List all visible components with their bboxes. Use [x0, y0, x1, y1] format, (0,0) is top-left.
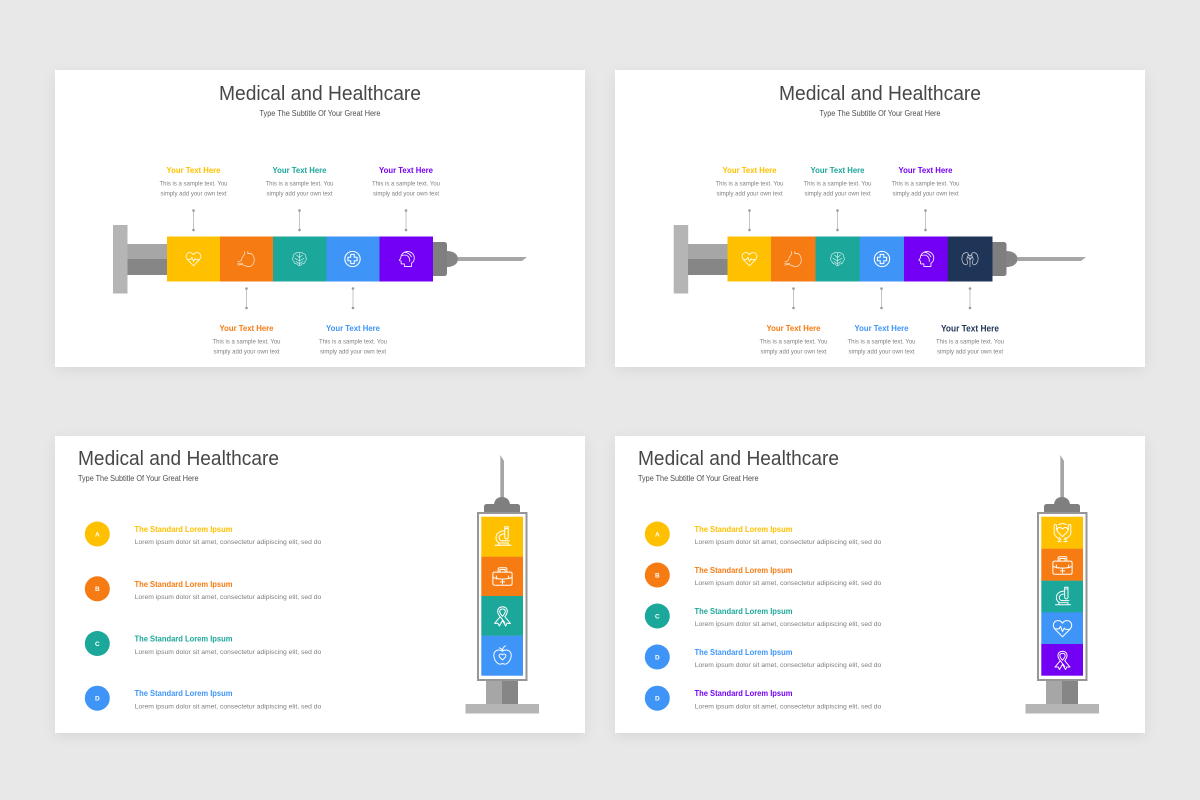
text block: blue: simply add your own text: [320, 349, 386, 356]
list item A: [645, 522, 882, 546]
barrel segments: [1041, 517, 1083, 676]
list item E labelled D: Lorem ipsum dolor sit amet, consectetur adipiscing elit, sed do: [695, 704, 882, 710]
icon: medical cross: [345, 251, 360, 267]
icon: kidneys: [962, 253, 978, 267]
icon: heart pulse: [1053, 621, 1072, 637]
text block: teal: [266, 165, 334, 198]
list item D: Lorem ipsum dolor sit amet, consectetur adipiscing elit, sed do: [695, 662, 882, 669]
vertical syringe plunger: [466, 680, 539, 714]
list item D: The Standard Lorem Ipsum: [134, 688, 233, 698]
text block: yellow: simply add your own text: [160, 191, 227, 198]
syringe plunger: [113, 225, 168, 294]
list item D: Lorem ipsum dolor sit amet, consectetur adipiscing elit, sed do: [135, 704, 322, 710]
vertical syringe plunger: [1026, 680, 1099, 714]
icon: apple: [494, 646, 511, 664]
list item D: [645, 644, 882, 670]
list item B: Lorem ipsum dolor sit amet, consectetur adipiscing elit, sed do: [695, 580, 882, 587]
list item E labelled D: [645, 686, 882, 711]
icon: ribbon: [1055, 651, 1070, 670]
text block: yellow: simply add your own text: [716, 191, 783, 198]
panel: vertical syringe with five items: [615, 436, 1145, 733]
text block: purple: [372, 165, 440, 198]
text block: yellow: Your Text Here: [722, 165, 777, 175]
syringe barrel segments: [728, 236, 992, 282]
connector 1: [748, 209, 751, 231]
text block: blue: [319, 323, 387, 356]
icon: brain: [293, 252, 306, 266]
text block: blue: This is a sample text. You: [848, 338, 916, 345]
text block: purple: This is a sample text. You: [372, 180, 440, 187]
list item A: The Standard Lorem Ipsum: [134, 524, 233, 534]
text block: orange: Your Text Here: [766, 323, 821, 333]
icon: microscope: [1056, 587, 1070, 605]
title: Medical and Healthcare: [219, 83, 421, 105]
text block: yellow: Your Text Here: [166, 165, 221, 175]
list item A: The Standard Lorem Ipsum: [694, 524, 793, 534]
text block: yellow: [716, 165, 784, 198]
list item C: The Standard Lorem Ipsum: [134, 634, 233, 644]
text block: purple: simply add your own text: [892, 191, 959, 198]
title: Medical and Healthcare: [638, 448, 839, 470]
syringe plunger: [674, 225, 728, 294]
list item A: Lorem ipsum dolor sit amet, consectetur adipiscing elit, sed do: [695, 539, 882, 546]
title: Medical and Healthcare: [78, 448, 279, 470]
text block: teal: simply add your own text: [266, 191, 333, 198]
syringe hub and needle: [992, 242, 1086, 276]
list item A: A: [95, 531, 100, 538]
icon: hands holding heart: [1054, 524, 1071, 542]
text block: teal: Your Text Here: [810, 165, 865, 175]
vertical syringe needle and hub: [484, 455, 520, 513]
list item C: C: [655, 613, 660, 620]
text block: teal: This is a sample text. You: [266, 180, 334, 187]
syringe hub and needle: [433, 242, 527, 276]
list item B: [645, 562, 882, 588]
list item C: Lorem ipsum dolor sit amet, consectetur adipiscing elit, sed do: [135, 649, 322, 656]
panel: horizontal syringe with five segments: [55, 70, 585, 367]
text block: yellow: This is a sample text. You: [716, 180, 784, 187]
text block: purple: Your Text Here: [379, 165, 433, 175]
text block: purple: This is a sample text. You: [892, 180, 960, 187]
text block: orange: [212, 323, 281, 356]
connector 2: [792, 287, 795, 309]
text block: blue: Your Text Here: [854, 323, 909, 333]
text block: orange: Your Text Here: [220, 323, 274, 333]
text block: teal: This is a sample text. You: [804, 180, 872, 187]
list item A: Lorem ipsum dolor sit amet, consectetur adipiscing elit, sed do: [135, 539, 322, 546]
subtitle: Type The Subtitle Of Your Great Here: [820, 109, 941, 118]
list item B: B: [655, 572, 660, 579]
title: Medical and Healthcare: [779, 83, 981, 105]
vertical syringe needle and hub: [1044, 455, 1080, 513]
panel: vertical syringe with four items: [55, 436, 585, 733]
list item A: [85, 522, 322, 546]
list item E labelled D: D: [655, 696, 660, 702]
text block: yellow: [160, 165, 228, 198]
vertical syringe barrel: [478, 513, 526, 680]
connector 1: [192, 209, 195, 231]
list item C: C: [95, 641, 100, 648]
text block: navy: Your Text Here: [941, 324, 999, 334]
icon: microscope: [495, 527, 511, 545]
list item B: The Standard Lorem Ipsum: [134, 579, 233, 589]
text block: blue: simply add your own text: [848, 349, 915, 356]
vertical syringe barrel: [1038, 513, 1086, 680]
list item D: The Standard Lorem Ipsum: [694, 647, 793, 657]
list item E labelled D: The Standard Lorem Ipsum: [694, 688, 793, 698]
text block: orange: [760, 323, 828, 356]
list item A: A: [655, 531, 660, 538]
subtitle: Type The Subtitle Of Your Great Here: [638, 474, 759, 483]
list item D: D: [655, 654, 660, 661]
text block: yellow: This is a sample text. You: [160, 180, 228, 187]
icon: heart pulse: [742, 253, 757, 266]
icon: head: [919, 252, 934, 266]
syringe barrel segments: [167, 236, 433, 282]
icon: stomach: [238, 252, 254, 266]
text block: navy: [936, 324, 1004, 356]
list item D: D: [95, 696, 100, 702]
barrel segments: [481, 517, 523, 676]
subtitle: Type The Subtitle Of Your Great Here: [260, 109, 381, 118]
list item C: The Standard Lorem Ipsum: [694, 606, 793, 616]
text block: purple: simply add your own text: [373, 191, 439, 198]
text block: orange: This is a sample text. You: [760, 338, 828, 345]
text block: orange: simply add your own text: [214, 349, 280, 356]
text block: teal: [804, 165, 872, 198]
connector 6: [969, 287, 971, 309]
connector 3: [836, 209, 839, 231]
list item C: Lorem ipsum dolor sit amet, consectetur adipiscing elit, sed do: [695, 621, 882, 628]
icon: head: [399, 252, 414, 266]
icon: first aid kit: [1053, 557, 1072, 574]
list item B: B: [95, 586, 100, 593]
list item C: [85, 631, 322, 656]
list item C: [645, 604, 882, 628]
text block: blue: This is a sample text. You: [319, 338, 387, 345]
list item D: [85, 686, 322, 711]
icon: brain: [831, 252, 844, 266]
connector 5: [924, 209, 927, 231]
connector 3: [298, 209, 301, 231]
connector 5: [405, 209, 407, 231]
panel: horizontal syringe with six segments: [615, 70, 1145, 367]
text block: orange: This is a sample text. You: [212, 338, 281, 345]
list item B: [85, 576, 322, 601]
subtitle: Type The Subtitle Of Your Great Here: [78, 474, 199, 483]
connector 4: [352, 287, 354, 309]
list item B: The Standard Lorem Ipsum: [694, 565, 793, 575]
text block: purple: [892, 165, 960, 198]
text block: teal: Your Text Here: [272, 165, 327, 175]
text block: teal: simply add your own text: [804, 191, 871, 198]
icon: medical cross: [874, 251, 890, 267]
icon: ribbon: [495, 607, 510, 626]
text block: navy: simply add your own text: [937, 349, 1003, 356]
icon: heart pulse: [186, 253, 201, 266]
icon: stomach: [785, 252, 801, 266]
icon: first aid kit: [493, 568, 512, 585]
text block: blue: Your Text Here: [326, 323, 380, 333]
text block: navy: This is a sample text. You: [936, 338, 1004, 345]
text block: purple: Your Text Here: [898, 165, 953, 175]
connector 2: [245, 287, 248, 309]
list item B: Lorem ipsum dolor sit amet, consectetur adipiscing elit, sed do: [135, 594, 322, 601]
text block: orange: simply add your own text: [760, 349, 827, 356]
connector 4: [880, 287, 883, 309]
text block: blue: [848, 323, 916, 356]
